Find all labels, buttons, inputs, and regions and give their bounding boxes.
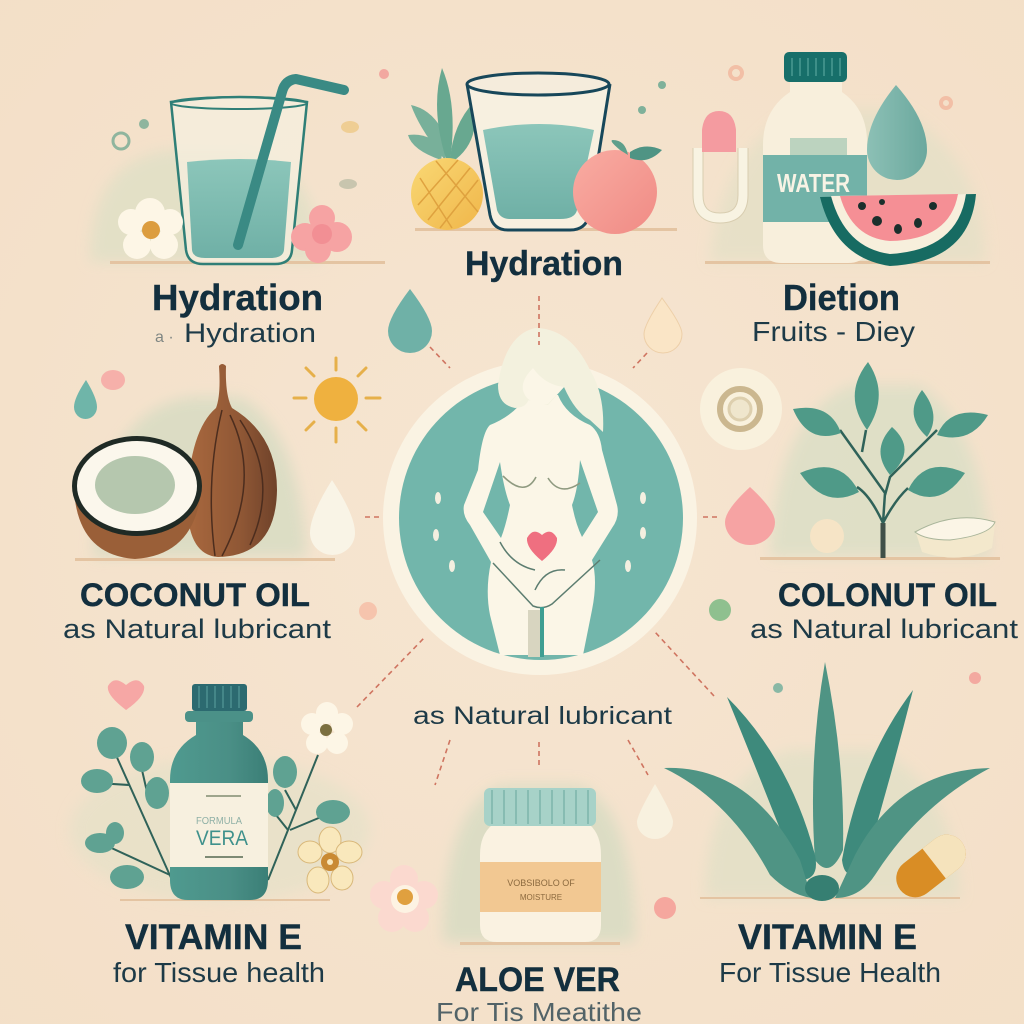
heading: coconut oil left: COCONUT OIL bbox=[80, 577, 310, 613]
icon: bottle bbox=[763, 52, 867, 263]
heading: hydration left: a · bbox=[155, 329, 174, 346]
icon: yellow flower bbox=[298, 827, 362, 893]
heading: hydration center: Hydration bbox=[465, 245, 623, 283]
icon: glass bbox=[467, 73, 610, 230]
connector lines bbox=[357, 296, 720, 785]
decorative dots bbox=[773, 672, 981, 693]
panel: glass with fruits bbox=[408, 68, 677, 234]
icon: pink blob bbox=[101, 370, 125, 390]
icon: watermelon bbox=[820, 194, 976, 266]
icon: small teal drop bbox=[74, 380, 97, 419]
figure hair bbox=[498, 328, 603, 432]
icon: pink flower bbox=[291, 205, 352, 263]
heading: dietion bbox=[752, 277, 915, 347]
heading: hydration left bbox=[152, 277, 323, 348]
icon: bottle: FORMULA bbox=[196, 816, 242, 827]
icon: jar: VOBSIBOLO OF bbox=[507, 878, 575, 888]
panel: coconut bbox=[72, 358, 380, 561]
icon: drop bbox=[637, 784, 673, 839]
decorative dots bbox=[359, 599, 731, 621]
icon: peach bbox=[573, 140, 662, 234]
icon: bottle: VERA bbox=[196, 827, 248, 850]
heading: vitamin e left bbox=[113, 918, 325, 988]
heading: aloe vera bbox=[436, 961, 642, 1024]
decorative dots bbox=[730, 67, 951, 108]
icon: flower pink white bbox=[370, 865, 438, 932]
heading: aloe vera: ALOE VER bbox=[455, 961, 620, 999]
heading: hydration left: Hydration bbox=[152, 277, 323, 318]
icon: cream dish bbox=[915, 518, 995, 558]
icon: cream flower bbox=[301, 702, 353, 754]
icon: bottle: WATER bbox=[777, 168, 850, 198]
icon: pink heart bbox=[108, 680, 144, 710]
icon: jar: MOISTURE bbox=[520, 893, 562, 902]
heading: hydration left: Hydration bbox=[184, 318, 316, 348]
icon: branches bbox=[81, 727, 350, 889]
icon: center teal drop bbox=[388, 289, 432, 353]
icon: ring disc bbox=[700, 368, 782, 450]
heading: dietion: Fruits - Diey bbox=[752, 316, 915, 347]
heading: vitamin e right bbox=[719, 918, 941, 988]
icon: capsule bbox=[889, 827, 973, 905]
center caption: as Natural lubricant bbox=[413, 702, 672, 730]
icon: coconut half bbox=[72, 436, 202, 559]
icon: test tube pink bbox=[698, 111, 743, 218]
icon: aloe leaves bbox=[664, 662, 990, 901]
panel: central figure bbox=[383, 328, 697, 675]
panel: hydration glass with straw bbox=[90, 69, 389, 264]
heading: vitamin e right: VITAMIN E bbox=[738, 918, 917, 957]
icon: heart bbox=[527, 532, 557, 561]
figure body bbox=[464, 395, 618, 657]
panel: vitamin bottle bbox=[70, 680, 370, 902]
figure face bbox=[523, 368, 564, 404]
heading: coconut oil right bbox=[750, 577, 1019, 644]
panel: water bottle and watermelon bbox=[698, 52, 990, 266]
icon: white flower bbox=[118, 198, 183, 259]
panel: plant right bbox=[700, 362, 1000, 560]
heading: dietion: Dietion bbox=[783, 277, 900, 318]
droplets bbox=[433, 492, 646, 572]
icon: straw bbox=[238, 79, 344, 245]
icon: pink drop bbox=[725, 487, 775, 545]
decorative: green splats bbox=[638, 81, 666, 114]
panel: jar bbox=[370, 784, 676, 945]
icon: sun bbox=[294, 358, 380, 442]
decorative dots bbox=[113, 69, 389, 189]
icon: plant bbox=[793, 362, 988, 558]
icon: drop teal bbox=[867, 85, 927, 180]
icon: jar bbox=[480, 788, 601, 942]
heading: coconut oil right: as Natural lubricant bbox=[750, 614, 1019, 644]
icon: ball bbox=[810, 519, 844, 553]
icon: glass bbox=[171, 97, 307, 264]
heading: vitamin e left: VITAMIN E bbox=[125, 918, 302, 957]
icon: pink dot bbox=[654, 897, 676, 919]
icon: whole coconut bbox=[187, 364, 277, 557]
heading: vitamin e left: for Tissue health bbox=[113, 957, 325, 988]
icon: pineapple bbox=[408, 68, 483, 230]
heading: coconut oil right: COLONUT OIL bbox=[778, 577, 997, 613]
icon: cream drop bbox=[644, 298, 682, 353]
heading: vitamin e right: For Tissue Health bbox=[719, 957, 941, 988]
icon: bottle bbox=[170, 684, 268, 900]
heading: coconut oil left bbox=[63, 577, 332, 644]
panel: aloe plant bbox=[664, 662, 990, 905]
icon: milk drop bbox=[310, 480, 355, 555]
heading: coconut oil left: as Natural lubricant bbox=[63, 614, 332, 644]
